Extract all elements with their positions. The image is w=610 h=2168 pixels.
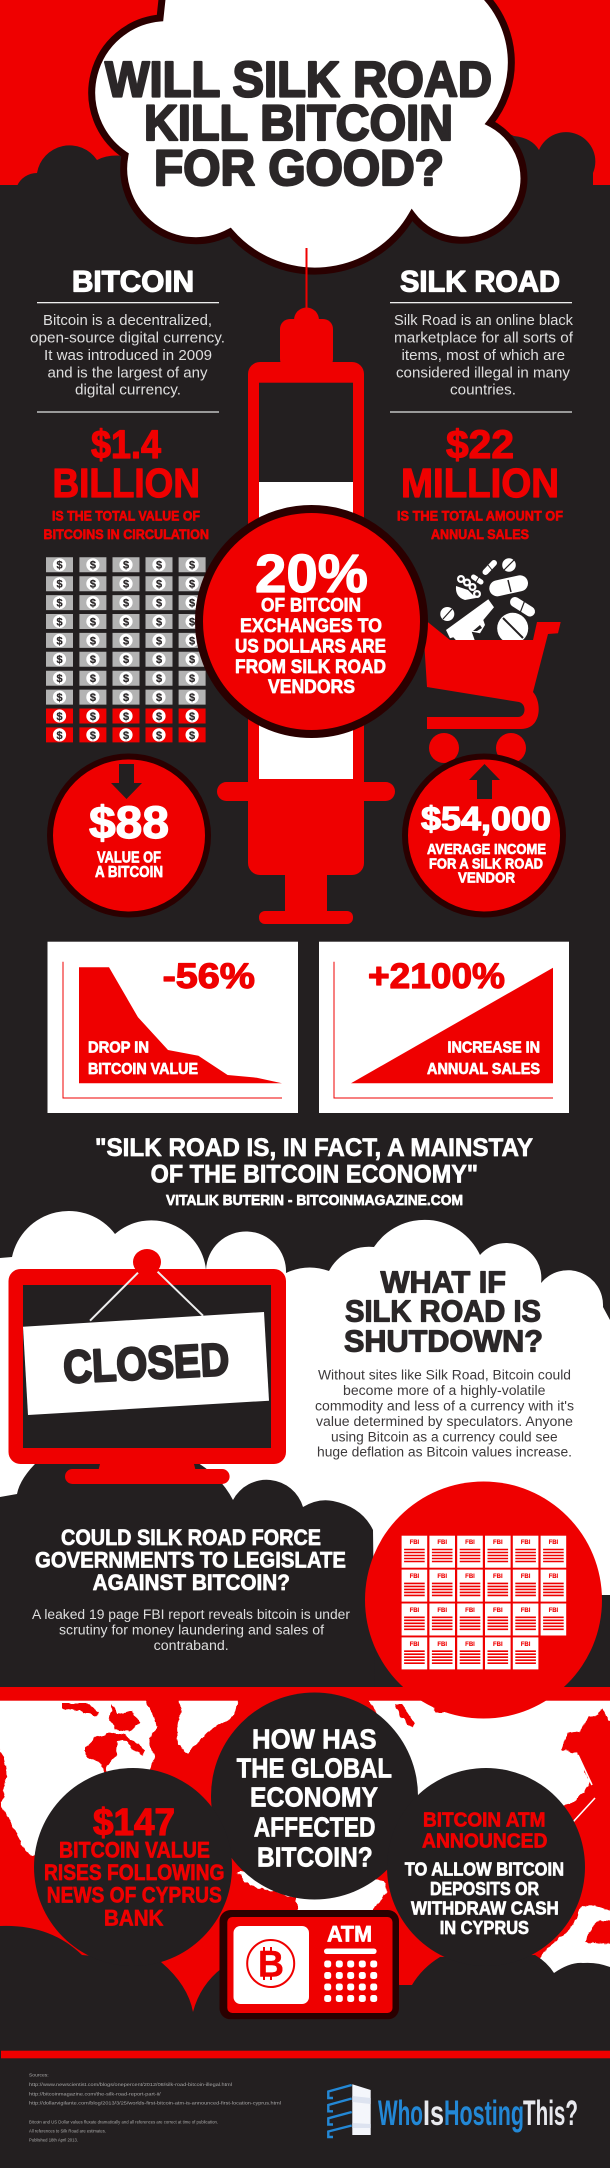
callout: 147 dollars: NEWS OF CYPRUS	[47, 1883, 222, 1908]
callout: 147 dollars: $147	[93, 1802, 175, 1844]
panel: fbi report documents: FBI	[465, 1574, 475, 1580]
panel: could silk road force governments	[32, 1525, 351, 1653]
stat: 1.4 billion: BITCOINS IN CIRCULATION	[44, 526, 209, 542]
callout: 147 dollars	[34, 1768, 232, 1966]
panel: fbi report documents: FBI	[493, 1642, 503, 1648]
banknote grid	[46, 557, 206, 742]
banknote grid: $$$$$	[56, 692, 195, 704]
icon: shopping cart	[424, 619, 561, 763]
callout: how has the global economy: AFFECTED	[254, 1812, 376, 1843]
title cloud	[92, 0, 524, 271]
callout: bitcoin atm announced: ANNOUNCED	[422, 1831, 548, 1853]
logo: who is hosting this: Hosting	[444, 2094, 524, 2133]
callout: 20 percent	[199, 509, 424, 734]
sources: http://bitcoinmagazine.com/the-silk-road-report-part-ii/	[29, 2091, 162, 2096]
panel: could silk road force governments: scrutiny for money laundering and sales of	[59, 1623, 324, 1638]
panel: fbi report documents: FBI	[410, 1608, 420, 1614]
callout: value of a bitcoin: $88	[89, 797, 169, 848]
title	[105, 52, 492, 196]
red sky header	[0, 0, 610, 186]
panel: what if silk road is shutdown	[315, 1265, 574, 1460]
panel: could silk road force governments: GOVERNMENTS TO LEGISLATE	[35, 1547, 346, 1572]
footer band	[1, 2051, 610, 2058]
callout: bitcoin atm announced	[387, 1768, 585, 1966]
banknote grid: $$$$$	[56, 711, 195, 723]
icon: bitcoin atm	[220, 1910, 399, 2019]
stat: 22 million: MILLION	[401, 460, 559, 506]
icon: bitcoin atm: ATM	[327, 1922, 372, 1947]
callout: bitcoin atm announced: TO ALLOW BITCOIN	[405, 1860, 564, 1880]
panel: fbi report documents	[365, 1482, 602, 1718]
panel: fbi report documents: FBI	[493, 1574, 503, 1580]
panel: silk road intro: SILK ROAD	[400, 266, 560, 299]
banknote grid: $$$$$	[56, 579, 195, 591]
panel: bitcoin intro: open-source digital currency.	[30, 330, 225, 346]
panel: could silk road force governments: contraband.	[154, 1638, 229, 1653]
panel: bitcoin intro: BITCOIN	[72, 266, 194, 299]
banknote grid: $$$$$	[56, 730, 195, 742]
panel: bitcoin intro: digital currency.	[75, 383, 181, 399]
banknote grid: $$$$$	[56, 616, 195, 628]
panel: fbi report documents: FBI	[549, 1574, 559, 1580]
banknote grid: $$$$$	[56, 635, 195, 647]
callout: how has the global economy: ECONOMY	[250, 1782, 378, 1813]
callout: 147 dollars: RISES FOLLOWING	[44, 1860, 224, 1885]
panel: silk road intro: Silk Road is an online black	[394, 313, 574, 329]
callout: how has the global economy: THE GLOBAL	[237, 1752, 392, 1783]
callout: 20 percent: EXCHANGES TO	[240, 616, 382, 637]
panel: bitcoin intro	[30, 266, 225, 413]
chart: drop in bitcoin value	[48, 942, 298, 1113]
white cloud section	[0, 1211, 610, 1600]
quote: VITALIK BUTERIN - BITCOINMAGAZINE.COM	[166, 1192, 463, 1209]
title: KILL BITCOIN	[144, 95, 453, 151]
sources	[29, 2073, 281, 2143]
panel: silk road intro: items, most of which are	[402, 348, 565, 364]
callout: 20 percent: FROM SILK ROAD	[235, 657, 386, 678]
panel: what if silk road is shutdown: WHAT IF	[380, 1265, 506, 1300]
stat: 22 million: IS THE TOTAL AMOUNT OF	[397, 508, 563, 524]
stat: 22 million: $22	[446, 423, 514, 467]
chart: increase in annual sales: INCREASE IN	[448, 1040, 540, 1057]
panel: silk road intro: considered illegal in many	[396, 365, 571, 381]
panel: what if silk road is shutdown: SILK ROAD IS	[345, 1294, 541, 1329]
callout: vendor income: $54,000	[421, 800, 551, 837]
panel: fbi report documents: FBI	[465, 1608, 475, 1614]
chart: drop in bitcoin value: -56%	[163, 957, 255, 996]
panel: fbi report documents: FBI	[521, 1574, 531, 1580]
panel: could silk road force governments: COULD SILK ROAD FORCE	[61, 1525, 321, 1550]
stat: 1.4 billion: $1.4	[91, 423, 162, 467]
panel: what if silk road is shutdown: huge deflation as Bitcoin values increase.	[317, 1445, 572, 1460]
title: WILL SILK ROAD	[105, 52, 492, 108]
sources: All references to Silk Road are estimates.	[29, 2129, 106, 2134]
chart: drop in bitcoin value: DROP IN	[88, 1040, 149, 1057]
callout: value of a bitcoin	[50, 756, 208, 914]
callout: how has the global economy: HOW HAS	[252, 1723, 377, 1754]
callout: how has the global economy: BITCOIN?	[257, 1842, 373, 1873]
panel: fbi report documents: FBI	[465, 1642, 475, 1648]
panel: silk road intro: countries.	[450, 383, 516, 399]
panel: fbi report documents: FBI	[437, 1608, 447, 1614]
sources: Bitcoin and US Dollar values fluxate dramatically and all references are correct at time of publication.	[29, 2119, 218, 2124]
sources: http://www.newscientist.com/blogs/onepercent/2012/08/silk-road-bitcoin-illegal.html	[29, 2082, 232, 2087]
callout: 147 dollars: BANK	[104, 1905, 163, 1930]
panel: what if silk road is shutdown: value determined by speculators. Anyone	[316, 1414, 573, 1429]
panel: bitcoin intro: It was introduced in 2009	[44, 348, 212, 364]
sources: http://dollarvigilante.com/blog/2013/3/25/worlds-first-bitcoin-atm-is-announced-first-location-cyprus.html	[29, 2101, 281, 2106]
panel: fbi report documents: FBI	[465, 1540, 475, 1546]
panel: what if silk road is shutdown: commodity and less of a currency with it's	[315, 1398, 574, 1413]
stat: 1.4 billion	[44, 423, 209, 542]
callout: 20 percent: US DOLLARS ARE	[235, 637, 386, 658]
panel: fbi report documents: FBI	[493, 1608, 503, 1614]
panel: fbi report documents: FBI	[437, 1574, 447, 1580]
stat: 1.4 billion: IS THE TOTAL VALUE OF	[52, 508, 200, 524]
panel: fbi report documents: FBI	[410, 1574, 420, 1580]
callout: vendor income: FOR A SILK ROAD	[429, 856, 543, 873]
chart: increase in annual sales: +2100%	[368, 957, 505, 996]
panel: could silk road force governments: AGAINST BITCOIN?	[93, 1570, 290, 1595]
panel: fbi report documents: FBI	[549, 1608, 559, 1614]
panel: what if silk road is shutdown: SHUTDOWN?	[344, 1324, 543, 1359]
chart: increase in annual sales	[319, 942, 569, 1113]
callout: 147 dollars: BITCOIN VALUE	[59, 1838, 210, 1863]
panel: fbi report documents: FBI	[410, 1642, 420, 1648]
callout: vendor income: AVERAGE INCOME	[427, 841, 546, 858]
banknote grid: $$$$$	[56, 598, 195, 610]
stat: 22 million	[397, 423, 563, 542]
logo: who is hosting this: Who	[378, 2094, 423, 2133]
panel: fbi report documents: FBI	[521, 1608, 531, 1614]
callout: how has the global economy	[211, 1692, 418, 1900]
callout: bitcoin atm announced: WITHDRAW CASH	[411, 1898, 559, 1918]
banknote grid: $$$$$	[56, 560, 195, 572]
world map section	[0, 1687, 610, 2052]
quote	[95, 1134, 533, 1209]
stat: 1.4 billion: BILLION	[52, 460, 200, 506]
panel: what if silk road is shutdown: using Bitcoin as a currency could see	[331, 1429, 558, 1444]
callout: bitcoin atm announced: BITCOIN ATM	[423, 1810, 546, 1832]
sources: Sources:	[29, 2073, 49, 2078]
panel: could silk road force governments: A leaked 19 page FBI report reveals bitcoin is under	[32, 1607, 351, 1622]
callout: value of a bitcoin: A BITCOIN	[95, 864, 163, 881]
panel: silk road intro	[390, 266, 574, 413]
callout: 20 percent: VENDORS	[268, 677, 355, 698]
icon: up arrow	[469, 764, 500, 799]
icon: contraband items	[440, 558, 530, 644]
syringe	[217, 248, 395, 924]
panel: what if silk road is shutdown: Without sites like Silk Road, Bitcoin could	[318, 1367, 571, 1382]
icon: closed monitor	[8, 1249, 286, 1484]
callout: bitcoin atm announced: IN CYPRUS	[440, 1918, 529, 1938]
banknote grid: $$$$$	[56, 654, 195, 666]
dark cloud section	[0, 1460, 610, 1690]
chart: increase in annual sales: ANNUAL SALES	[427, 1061, 540, 1078]
panel: fbi report documents: FBI	[549, 1540, 559, 1546]
stat: 22 million: ANNUAL SALES	[431, 526, 529, 542]
callout: 20 percent: OF BITCOIN	[261, 596, 361, 617]
callout: bitcoin atm announced: DEPOSITS OR	[430, 1879, 539, 1899]
icon: closed monitor: CLOSED	[62, 1333, 230, 1393]
icon: down arrow	[111, 764, 142, 799]
quote: OF THE BITCOIN ECONOMY"	[151, 1160, 478, 1188]
logo: who is hosting this	[328, 2084, 578, 2137]
panel: fbi report documents: FBI	[521, 1642, 531, 1648]
icon: bitcoin atm: B	[258, 1944, 284, 1984]
panel: fbi report documents: FBI	[437, 1642, 447, 1648]
chart: drop in bitcoin value: BITCOIN VALUE	[88, 1061, 198, 1078]
panel: silk road intro: marketplace for all sorts of	[394, 330, 574, 346]
title: FOR GOOD?	[154, 140, 444, 196]
logo: who is hosting this: Is	[423, 2094, 444, 2133]
panel: bitcoin intro: and is the largest of any	[48, 365, 208, 381]
panel: fbi report documents: FBI	[437, 1540, 447, 1546]
panel: bitcoin intro: Bitcoin is a decentralized,	[43, 313, 212, 329]
callout: vendor income	[405, 756, 563, 914]
dark bottom clouds	[0, 1926, 610, 2168]
panel: fbi report documents: FBI	[493, 1540, 503, 1546]
callout: vendor income: VENDOR	[458, 870, 515, 887]
sources: Published 18th April 2013.	[29, 2138, 78, 2143]
callout: value of a bitcoin: VALUE OF	[97, 850, 161, 867]
banknote grid: $$$$$	[56, 673, 195, 685]
panel: fbi report documents: FBI	[410, 1540, 420, 1546]
panel: fbi report documents: FBI	[521, 1540, 531, 1546]
quote: "SILK ROAD IS, IN FACT, A MAINSTAY	[95, 1134, 533, 1162]
callout: 20 percent: 20%	[255, 544, 368, 604]
panel: what if silk road is shutdown: become more of a highly-volatile	[343, 1383, 546, 1398]
